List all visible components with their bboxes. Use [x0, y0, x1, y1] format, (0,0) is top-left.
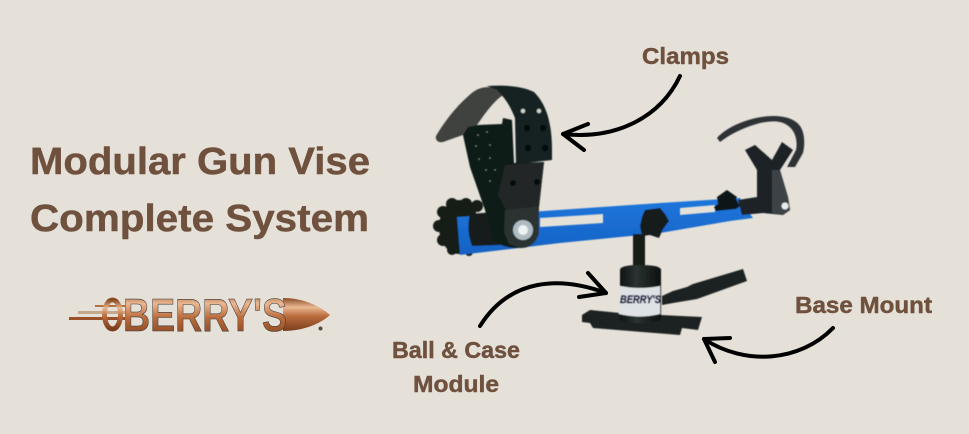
centre post [633, 234, 645, 268]
left knob [433, 198, 483, 256]
bullet tip [283, 298, 330, 331]
logo wordmark: BERRY'S [123, 289, 287, 341]
left clamp strap flap [436, 87, 503, 142]
body specks [475, 131, 496, 182]
clamp cylinder [468, 212, 500, 246]
module canister [620, 265, 661, 324]
right bar knob [714, 190, 740, 211]
title: Modular Gun Vise [30, 141, 370, 183]
logo: Berry's bullet [69, 289, 330, 341]
lower clamp plate [498, 162, 544, 210]
arrow: to clamps [563, 76, 680, 150]
strap holes [521, 109, 541, 113]
label: ball and case module: Module [413, 371, 499, 397]
right clamp strap [717, 116, 804, 167]
registered mark [318, 326, 322, 330]
canister label: BERRY'S [620, 294, 662, 306]
left clamp body [463, 118, 544, 248]
left clamp strap [487, 86, 552, 164]
arrow: to ball and case module [480, 273, 606, 326]
label: clamps: Clamps [642, 43, 729, 69]
arrow: to base mount [704, 328, 833, 362]
handle [662, 269, 747, 305]
centre knob [640, 208, 669, 238]
label: ball and case module: Ball & Case [392, 337, 520, 363]
label: ball and case module [392, 337, 520, 397]
title [30, 141, 370, 240]
right clamp body [738, 142, 793, 215]
canister label [619, 286, 662, 316]
right clamp bolt [782, 202, 788, 210]
label: base mount: Base Mount [795, 292, 932, 318]
base plate [582, 310, 702, 335]
letter O ring [104, 300, 120, 329]
product: gun vise [433, 86, 804, 335]
title: Complete System [30, 198, 369, 240]
left clamp bolt [513, 220, 533, 240]
blue bar [457, 198, 753, 255]
speed lines [69, 305, 125, 320]
